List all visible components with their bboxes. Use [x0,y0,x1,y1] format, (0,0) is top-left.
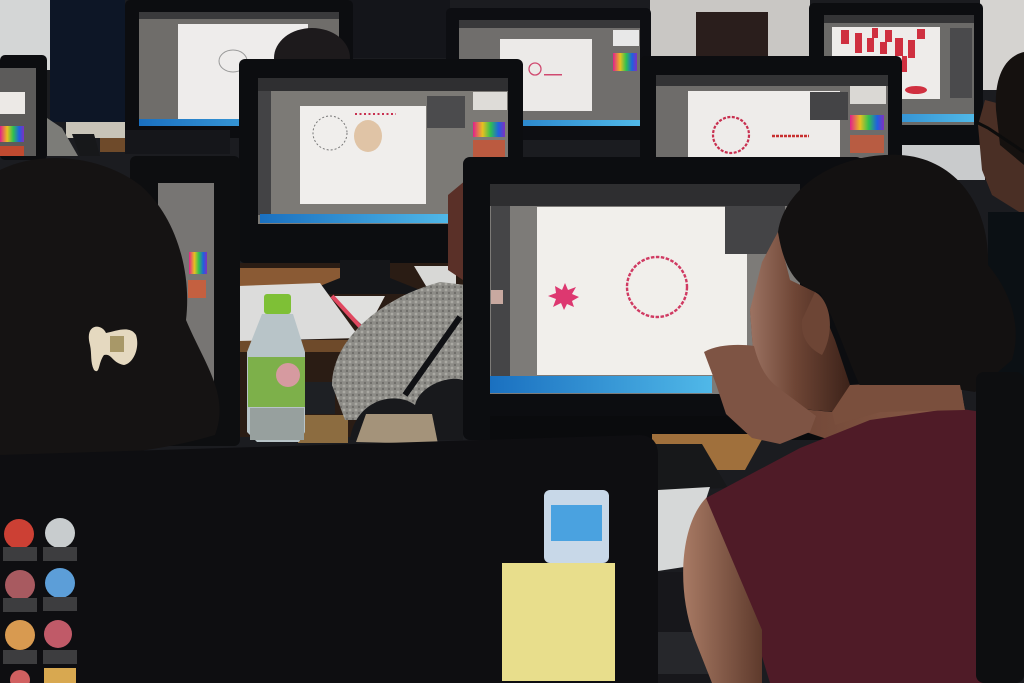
person right background [976,52,1024,382]
foreground monitor with desktop icons [0,435,658,683]
monitor stand and desk [238,260,463,443]
neck to collar [832,385,965,425]
woman right: head, hand and maroon top [683,155,1024,683]
back monitor: upper right with red circle [640,56,902,166]
back monitor: far left edge [0,55,47,160]
woman left: hair and hair clip [0,156,240,460]
middle monitor: circle and ellipse [239,59,523,263]
back monitor: top right, red figures [809,3,983,145]
neck and face [750,232,965,440]
arm [683,498,762,683]
raised hand [704,345,816,444]
desk front, notebook, paper and keyboard [356,414,765,683]
hair [778,155,1016,392]
head behind monitor [274,28,350,88]
water bottle [247,294,305,442]
main monitor: star and dotted circle [463,157,863,440]
maroon top [706,408,985,683]
person in grey sweater [332,180,466,440]
back monitor: top middle-right [446,8,651,140]
back monitor: top left [125,0,353,154]
